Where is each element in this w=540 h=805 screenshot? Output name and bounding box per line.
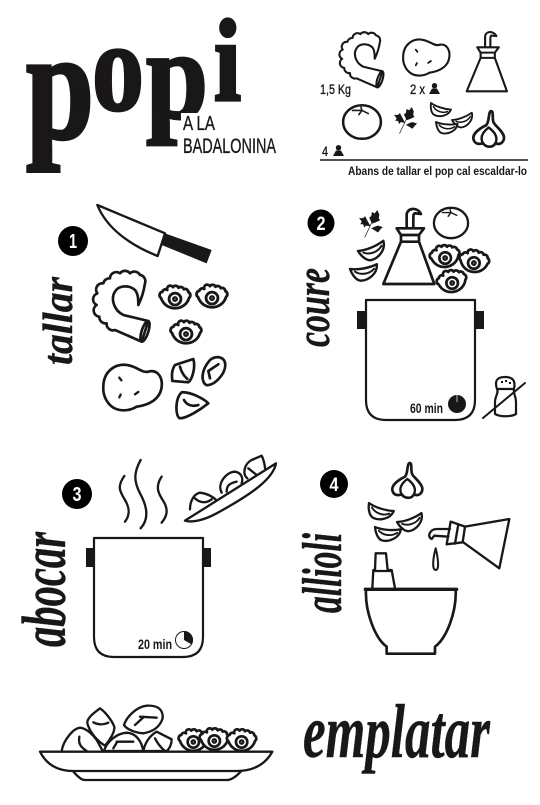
panel: step 1 tallar xyxy=(36,205,227,418)
panel: step 4 allioli xyxy=(292,463,509,654)
panel: ingredients xyxy=(320,32,528,178)
step number 2 xyxy=(308,210,334,236)
label: 2 x per person xyxy=(410,81,440,97)
step number 4: 4 xyxy=(330,475,339,496)
icon: octopus tentacle xyxy=(339,32,385,88)
icon: steam xyxy=(120,460,167,528)
icon: garlic bulb xyxy=(392,463,422,498)
step number 2: 2 xyxy=(316,214,326,235)
icon: potato xyxy=(403,39,449,76)
icon: garlic cloves xyxy=(350,241,388,282)
script word: coure: coure xyxy=(287,268,340,347)
label: 1,5 Kg: 1,5 Kg xyxy=(320,81,351,97)
icon: plate with food xyxy=(40,706,272,780)
time label: 20 min: 20 min xyxy=(138,636,172,652)
icon: octopus slices xyxy=(428,243,490,294)
icon: tomato xyxy=(343,105,381,139)
step number 3 xyxy=(62,479,92,509)
time label: 60 min: 60 min xyxy=(410,400,443,416)
panel: plated dish xyxy=(40,706,272,780)
panel: step 2 coure xyxy=(287,208,525,420)
script word: allioli: allioli xyxy=(292,533,354,613)
icon: tentacle xyxy=(93,271,151,342)
title: popi: p xyxy=(26,0,94,172)
rule xyxy=(320,159,528,161)
icon: pouring oil bottle xyxy=(429,519,509,568)
icon: cooking pot xyxy=(357,300,484,420)
subtitle: a la badalonina: A LA xyxy=(183,113,215,135)
icon: octopus slices xyxy=(160,285,227,343)
icon: oil drop xyxy=(433,548,438,570)
icon: no salt xyxy=(483,377,525,418)
icon: 60 minute clock xyxy=(448,395,466,413)
icon: parsley xyxy=(359,210,383,237)
icon: mortar and pestle xyxy=(365,553,457,654)
label: 4 per person xyxy=(322,143,344,159)
icon: cooking pot xyxy=(86,538,211,657)
icon: garlic cloves xyxy=(428,103,475,135)
icon: garlic cloves xyxy=(365,503,426,542)
title: popi xyxy=(26,0,241,172)
subtitle: a la badalonina xyxy=(181,113,276,158)
title: popi: p xyxy=(146,5,208,146)
subtitle: a la badalonina: BADALONINA xyxy=(183,135,276,158)
icon: oil bottle xyxy=(383,209,434,284)
script word: tallar: tallar xyxy=(36,276,82,365)
panel: step 3 abocar xyxy=(11,456,276,657)
label: 4 per person: 4 xyxy=(322,143,328,159)
script word: abocar: abocar xyxy=(11,531,79,647)
step number 4 xyxy=(320,470,348,498)
label: 2 x per person: 2 x xyxy=(410,81,425,97)
icon: 20 minute clock xyxy=(176,631,193,648)
icon: tomato xyxy=(434,208,468,238)
icon: potato pieces xyxy=(172,357,225,418)
icon: tilted plate with food xyxy=(185,456,276,521)
icon: knife xyxy=(97,205,212,263)
icon: parsley xyxy=(394,107,417,133)
icon: potato xyxy=(103,365,162,410)
step number 3: 3 xyxy=(72,484,82,506)
title: popi: o xyxy=(92,0,144,138)
step number 1: 1 xyxy=(69,231,77,253)
icon: oil bottle xyxy=(467,32,507,91)
icon: garlic bulb xyxy=(473,111,504,147)
step number 1 xyxy=(58,226,88,256)
